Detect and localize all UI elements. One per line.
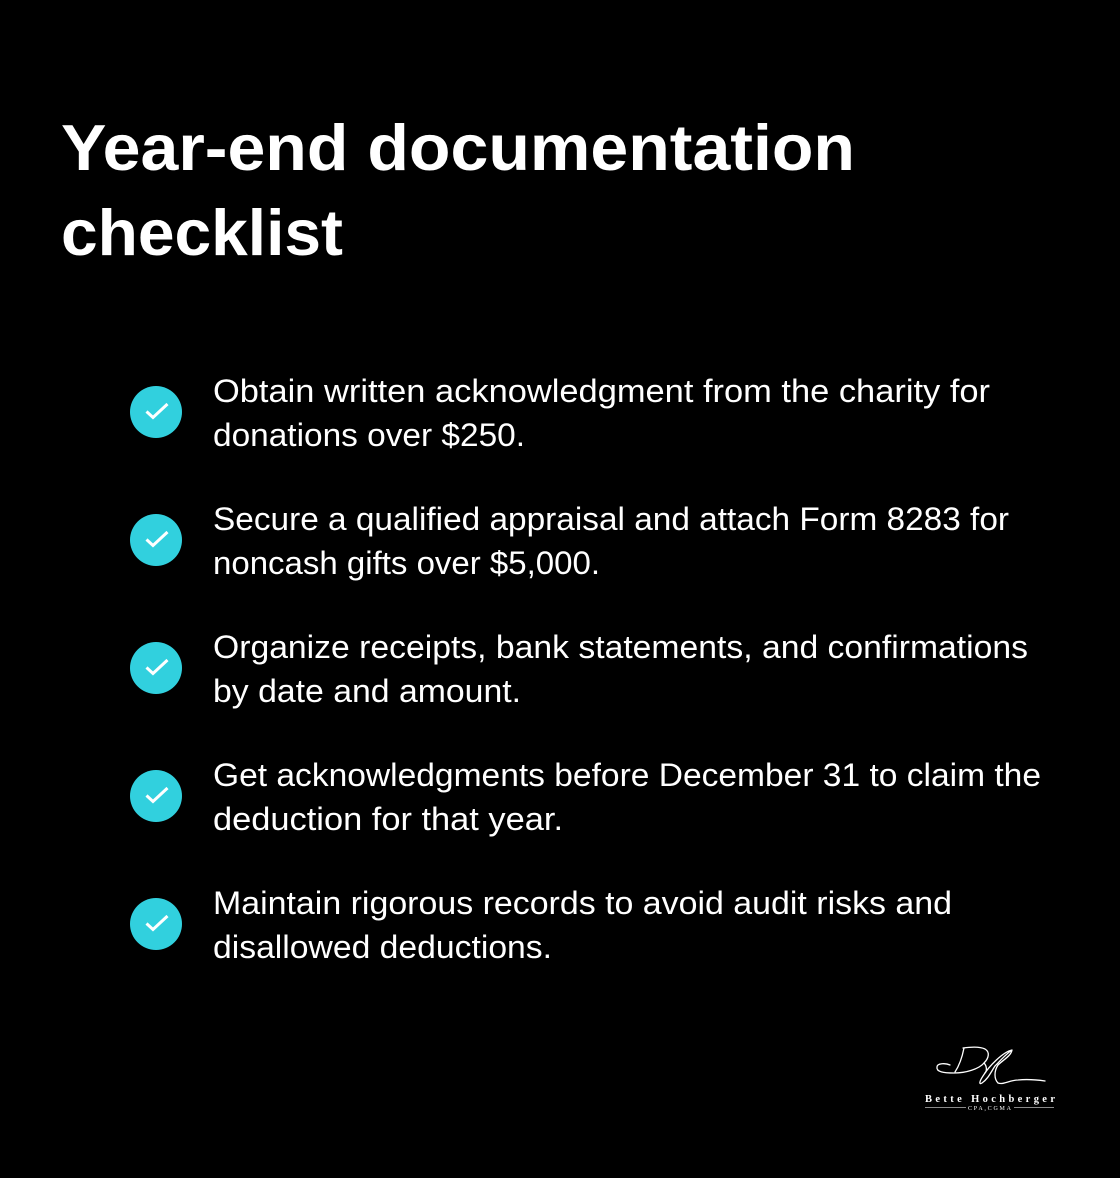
text: item 5: disallowed deductions. — [213, 929, 552, 965]
text: item 2: noncash gifts over $5,000. — [213, 545, 600, 581]
title: checklist — [61, 196, 343, 269]
checklist — [130, 373, 1041, 965]
item 4 — [130, 757, 1041, 837]
icon: check 4 — [130, 770, 182, 822]
credentials: CPA,CGMA — [968, 1106, 1012, 1112]
text: item 1: donations over $250. — [213, 417, 525, 453]
item 1 — [130, 373, 990, 453]
text: item 4 — [213, 757, 1041, 837]
text: item 3 — [213, 629, 1028, 709]
icon: check 5 — [130, 898, 182, 950]
item 5 — [130, 885, 952, 965]
text: item 2 — [213, 501, 1009, 581]
divider right — [1014, 1107, 1054, 1108]
text: item 5 — [213, 885, 952, 965]
text: item 1: Obtain written acknowledgment from the charity for — [213, 373, 990, 409]
item 3 — [130, 629, 1028, 709]
company name: Bette Hochberger — [925, 1094, 1055, 1105]
text: item 2: Secure a qualified appraisal and attach Form 8283 for — [213, 501, 1009, 537]
icon: check 1 — [130, 386, 182, 438]
text: item 4: Get acknowledgments before December 31 to claim the — [213, 757, 1041, 793]
logo: Bette Hochberger — [925, 1047, 1055, 1112]
text: item 3: Organize receipts, bank statements, and confirmations — [213, 629, 1028, 665]
divider left — [925, 1107, 966, 1108]
item 2 — [130, 501, 1009, 581]
text: item 3: by date and amount. — [213, 673, 521, 709]
text: item 5: Maintain rigorous records to avoid audit risks and — [213, 885, 952, 921]
icon: BH signature — [937, 1047, 1045, 1084]
title — [61, 111, 855, 269]
text: item 4: deduction for that year. — [213, 801, 563, 837]
title: Year-end documentation — [61, 111, 855, 184]
icon: check 3 — [130, 642, 182, 694]
icon: check 2 — [130, 514, 182, 566]
text: item 1 — [213, 373, 990, 453]
